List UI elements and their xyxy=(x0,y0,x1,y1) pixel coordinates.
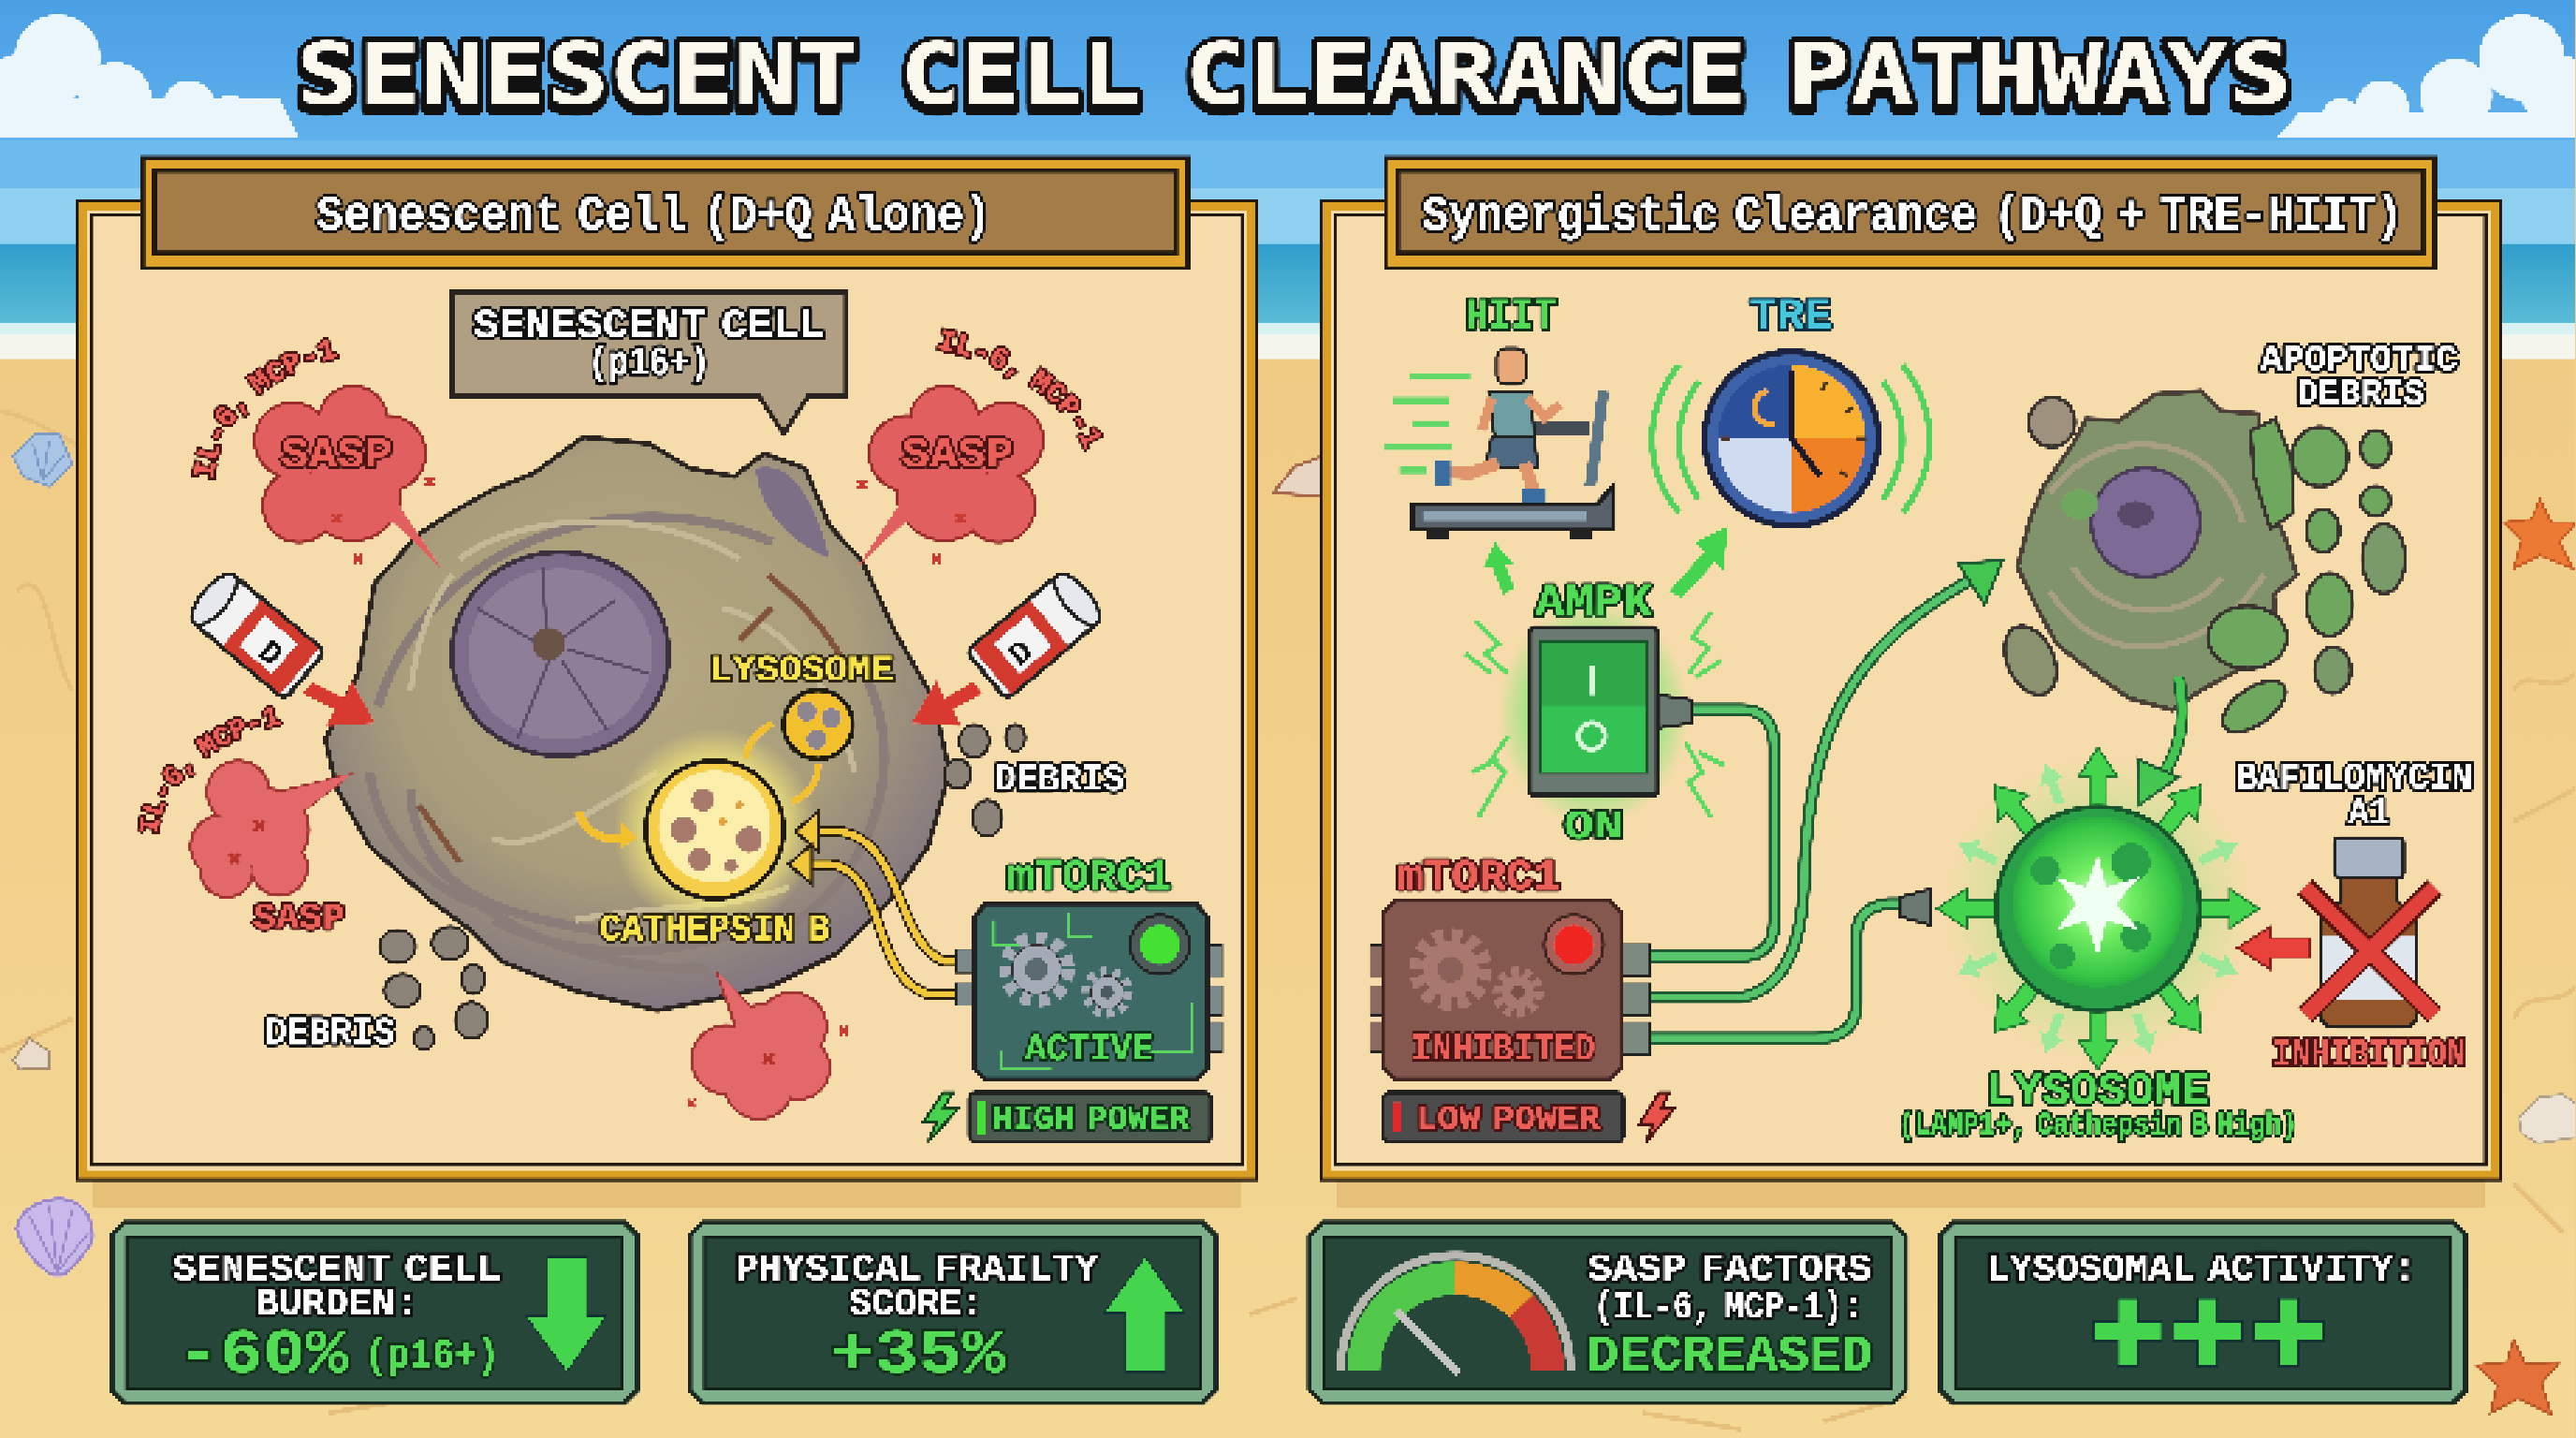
AMPK switch xyxy=(1466,579,1725,851)
bafilomycin A1 bottle inhibited: BAFILOMYCIN xyxy=(2236,757,2472,800)
callout: senescent cell label xyxy=(452,292,846,433)
pill: D right xyxy=(912,567,1107,726)
stat card: senescent cell burden: SENESCENT CELL xyxy=(172,1249,501,1292)
SASP cloud: bottom: ✖ xyxy=(838,1020,851,1045)
stat card: senescent cell burden xyxy=(111,1223,637,1403)
wires: yellow mTORC1 to cathepsin xyxy=(788,812,970,994)
cloud: upper right xyxy=(2277,15,2576,138)
icon: runner on treadmill xyxy=(1383,348,1614,539)
panel: synergistic clearance xyxy=(1321,157,2500,1208)
lysosome active xyxy=(1898,748,2298,1144)
SASP cloud: upper right: ✖ xyxy=(929,549,944,574)
panel header: Senescent Cell (D+Q Alone) xyxy=(316,189,991,245)
icon: triple plus xyxy=(2093,1298,2323,1367)
high power bar: HIGH POWER xyxy=(992,1102,1191,1139)
SASP cloud: bottom xyxy=(685,969,851,1121)
panel header xyxy=(143,157,1188,268)
stat card: senescent cell burden: (p16+) xyxy=(365,1333,500,1380)
title: CELL xyxy=(900,24,1142,125)
stat card: lysosomal activity xyxy=(1940,1223,2466,1403)
SASP cloud: upper right xyxy=(816,326,1104,610)
senescent cell body xyxy=(326,437,949,1010)
pill: D left xyxy=(184,567,374,726)
SASP cloud: upper left xyxy=(191,337,441,574)
stat card: physical frailty score: PHYSICAL FRAILTY xyxy=(735,1249,1099,1292)
stat card: SASP factors: DECREASED xyxy=(1587,1329,1873,1387)
callout: senescent cell label: SENESCENT CELL xyxy=(473,303,825,350)
stat card: SASP factors xyxy=(1310,1223,1906,1403)
bafilomycin A1 bottle inhibited: INHIBITION xyxy=(2272,1034,2466,1077)
faint burst arrows xyxy=(1953,759,2244,1058)
panel header xyxy=(1386,157,2435,268)
lysosome active: (LAMP1+, Cathepsin B High) xyxy=(1898,1108,2298,1144)
lysosome yellow: LYSOSOME xyxy=(710,651,894,692)
pill: D right: D xyxy=(1002,634,1041,675)
mTORC1 active chip: mTORC1 xyxy=(1007,853,1171,902)
cloud: upper left xyxy=(0,15,299,138)
apoptotic cell with debris: DEBRIS xyxy=(2297,374,2425,416)
title: CELL xyxy=(900,31,1142,131)
title: CLEARANCE xyxy=(1184,31,1747,131)
mTORC1 active chip xyxy=(956,853,1222,1079)
mTORC1 active chip: ACTIVE xyxy=(1025,1029,1153,1072)
debris: right: DEBRIS xyxy=(995,759,1124,802)
SASP cloud: lower left: ✖ xyxy=(252,814,268,844)
shell: tan xyxy=(1273,457,1321,496)
debris: lower left xyxy=(265,927,488,1055)
shell: blue xyxy=(13,433,72,486)
title: PATHWAYS xyxy=(1788,24,2291,125)
TRE label: TRE xyxy=(1749,293,1832,343)
icon: down arrow xyxy=(526,1257,607,1372)
lysosome yellow xyxy=(710,651,894,759)
mTORC1 inhibited chip xyxy=(1370,853,1649,1079)
title xyxy=(296,24,2291,131)
low power bar xyxy=(1383,1093,1674,1142)
HIIT label: HIIT xyxy=(1466,293,1557,343)
SASP cloud: upper left: SASP xyxy=(281,431,392,479)
stat card: physical frailty score: SCORE: xyxy=(849,1284,984,1327)
cathepsin B organelle: CATHEPSIN B xyxy=(600,909,829,952)
SASP cloud: upper left: ✖ xyxy=(351,549,365,574)
shell: small left xyxy=(13,1038,50,1070)
SASP cloud: lower left: ✖ xyxy=(227,847,242,876)
high power bar xyxy=(923,1093,1211,1142)
SASP cloud: upper right: ✖ xyxy=(856,476,870,501)
title: SENESCENT xyxy=(296,31,859,131)
icon: up arrow xyxy=(1104,1257,1184,1372)
panel header: Synergistic Clearance (D+Q + TRE-HIIT) xyxy=(1422,189,2403,245)
bafilomycin A1 bottle inhibited xyxy=(2236,757,2472,1077)
mTORC1 inhibited chip: mTORC1 xyxy=(1397,853,1560,902)
icon: clock with waves xyxy=(1652,352,1929,526)
title: PATHWAYS xyxy=(1788,31,2291,131)
stat card: SASP factors: (IL-6, MCP-1): xyxy=(1593,1287,1863,1330)
callout: senescent cell label: (p16+) xyxy=(588,341,710,388)
AMPK switch: AMPK xyxy=(1535,579,1652,628)
SASP cloud: upper left: ✖ xyxy=(423,472,437,497)
debris: right xyxy=(944,725,1124,836)
SASP cloud: upper left: IL-6, MCP-1 xyxy=(191,337,340,480)
arrows: AMPK to HIIT and TRE xyxy=(1484,526,1728,598)
gauge xyxy=(1340,1255,1571,1373)
debris: lower left: DEBRIS xyxy=(265,1012,395,1055)
stat card: lysosomal activity: LYSOSOMAL ACTIVITY: xyxy=(1986,1249,2417,1292)
shell: purple xyxy=(17,1199,93,1275)
shell: right pearl xyxy=(2519,1094,2576,1144)
SASP cloud: upper right: ✖ xyxy=(955,508,968,533)
bafilomycin A1 bottle inhibited: A1 xyxy=(2349,792,2390,835)
SASP cloud: lower left: IL-6, MCP-1 xyxy=(137,705,284,835)
AMPK switch: ON xyxy=(1564,804,1623,851)
cathepsin B organelle xyxy=(578,723,829,952)
title: CLEARANCE xyxy=(1184,24,1747,125)
title: SENESCENT xyxy=(296,24,859,125)
lysosome active: LYSOSOME xyxy=(1986,1065,2210,1118)
wires: green pathways xyxy=(1643,560,2002,1038)
stat card: senescent cell burden: BURDEN: xyxy=(256,1284,418,1327)
mTORC1 inhibited chip: INHIBITED xyxy=(1412,1029,1595,1072)
SASP cloud: upper right: SASP xyxy=(902,431,1014,479)
panel: senescent cell D+Q alone xyxy=(76,154,1258,1208)
pill: D left: D xyxy=(250,634,289,675)
apoptotic cell with debris xyxy=(1995,340,2458,805)
nucleus xyxy=(452,552,668,756)
SASP cloud: bottom: ✖ xyxy=(761,1048,777,1077)
SASP cloud: lower left xyxy=(137,694,358,940)
stat card: physical frailty score xyxy=(690,1223,1216,1403)
SASP cloud: bottom: ✖ xyxy=(685,1093,698,1117)
SASP cloud: upper right: IL-6, MCP-1 xyxy=(935,326,1104,452)
low power bar: LOW POWER xyxy=(1416,1102,1601,1139)
SASP cloud: upper left: ✖ xyxy=(330,508,344,533)
apoptotic cell with debris: APOPTOTIC xyxy=(2261,340,2458,381)
burst arrows xyxy=(1937,748,2259,1070)
starfish: lower right xyxy=(2476,1339,2559,1415)
stat card: SASP factors: SASP FACTORS xyxy=(1588,1249,1872,1292)
stat card: physical frailty score: +35% xyxy=(831,1320,1006,1391)
starfish: upper right xyxy=(2504,500,2576,568)
SASP cloud: lower left: SASP xyxy=(253,899,345,940)
stat card: senescent cell burden: -60% xyxy=(178,1320,349,1391)
